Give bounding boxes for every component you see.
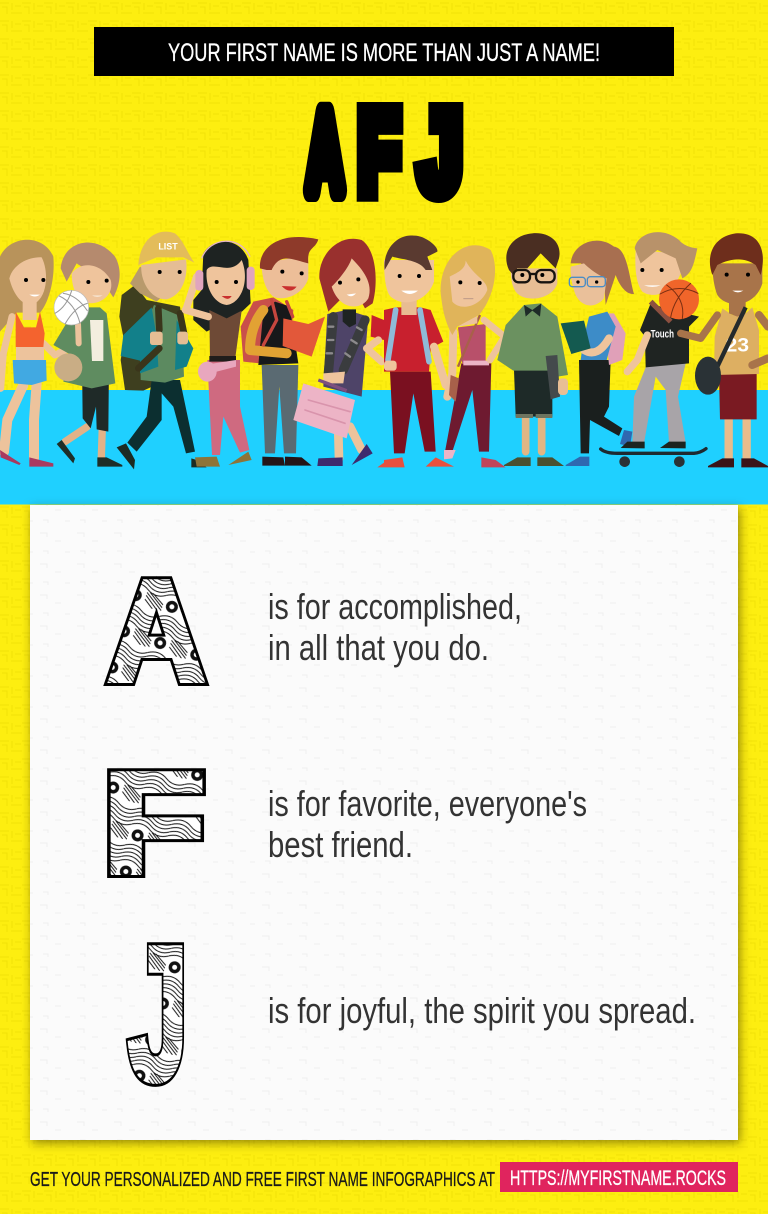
glasses — [569, 277, 605, 287]
text: A meaning: is for accomplished, — [268, 586, 522, 627]
person 12: curly-haired boy with tank top — [681, 233, 768, 467]
skateboard — [601, 449, 706, 467]
volleyball — [54, 290, 89, 325]
letter F: patterned: F — [103, 744, 205, 903]
text: A meaning: in all that you do. — [268, 627, 489, 668]
person 12: curly-haired boy with tank top: 23 — [726, 336, 749, 357]
person 3: hiker with backpack and cap — [117, 232, 207, 469]
blue floor band — [0, 390, 768, 504]
person 7: boy in red shirt — [384, 235, 454, 467]
letter A: patterned: A — [108, 552, 205, 711]
title: AFJ: J — [419, 87, 462, 217]
person 3: hiker with backpack and cap: LIST — [158, 241, 178, 251]
text: F meaning: best friend. — [268, 824, 413, 865]
title: AFJ: F — [358, 87, 400, 217]
banner: tagline: YOUR FIRST NAME IS MORE THAN JUST A NAME! — [168, 39, 600, 67]
letter J: patterned: J — [128, 908, 188, 1120]
letter A: patterned: A — [108, 552, 205, 711]
right half of the crowd — [384, 232, 768, 467]
text: A meaning — [268, 586, 522, 668]
person 9: boy with glasses and folder — [497, 233, 568, 466]
person 6: girl with pink case — [293, 239, 384, 467]
footer: call to action: GET YOUR PERSONALIZED AND FREE FIRST NAME INFOGRAPHICS AT — [30, 1169, 495, 1191]
left half of the crowd — [0, 232, 384, 469]
letter J: patterned — [128, 908, 188, 1120]
person 1: girl in orange top — [0, 240, 78, 467]
title: AFJ: A — [307, 91, 343, 214]
letter F: patterned: F — [103, 744, 205, 903]
person 11: skater with basketball: Touch — [651, 328, 674, 340]
person 10: girl with ponytail and tablet — [561, 241, 634, 466]
person 8: blonde girl — [441, 245, 506, 467]
title: AFJ — [307, 87, 462, 217]
person 4: girl with headphones and pink trousers — [185, 241, 255, 467]
glasses — [513, 270, 555, 282]
banner: tagline — [94, 27, 674, 76]
text: F meaning: is for favorite, everyone's — [268, 783, 587, 824]
panel: white meanings card — [30, 505, 738, 1140]
person 11: skater with basketball — [601, 232, 706, 467]
basketball — [659, 279, 699, 319]
person 5: boy with book — [241, 237, 325, 466]
letter J: patterned: J — [128, 908, 188, 1120]
text: F meaning — [268, 783, 587, 865]
person 2: girl with volleyball — [53, 243, 122, 467]
folder — [546, 355, 560, 399]
illustration: group of twelve young people — [0, 232, 768, 469]
